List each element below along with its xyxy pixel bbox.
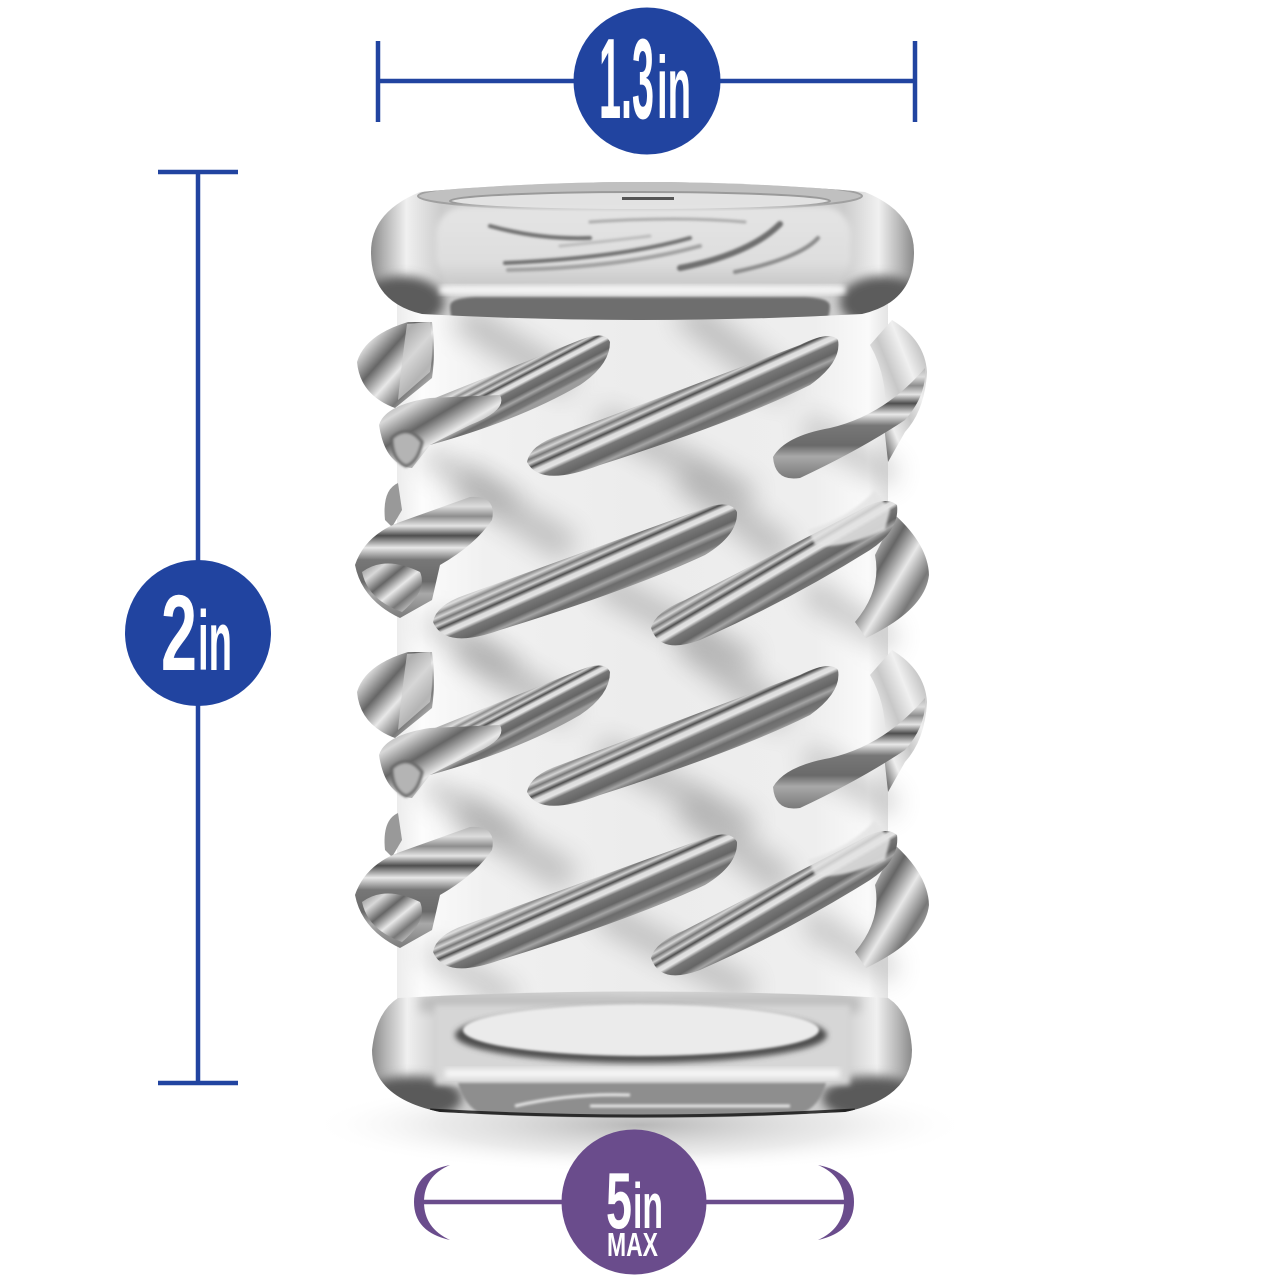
ridges row 3	[357, 650, 927, 809]
top ring	[371, 182, 914, 320]
center panel	[435, 1005, 850, 1085]
inner lens	[436, 207, 851, 285]
label: 5in: in	[633, 1170, 663, 1242]
label: 1.3in: 1.3	[599, 16, 654, 143]
dimension: height 2in	[125, 172, 271, 1083]
dimension: height 2in: in	[198, 594, 232, 688]
refracted ridge shadows	[422, 298, 898, 1009]
bottom ring	[372, 992, 912, 1118]
label: 1.3in	[599, 16, 691, 143]
top rim ellipse	[418, 181, 862, 211]
sleeve body	[397, 300, 888, 1010]
top band	[420, 996, 860, 1012]
base contact line	[430, 1110, 855, 1116]
dimension: width 1.3in	[378, 8, 915, 154]
base highlight lines	[515, 1095, 790, 1106]
lower highlight band	[445, 1069, 840, 1078]
label: 5in: 5	[606, 1156, 632, 1245]
lower highlight band	[440, 286, 845, 294]
dimension: circumference 5in max	[414, 1130, 854, 1274]
base reflection	[458, 1083, 826, 1118]
inner oval lens	[463, 1004, 819, 1056]
rim dark slit	[622, 197, 674, 200]
ridges row 1	[357, 320, 927, 479]
ground shadow	[310, 1077, 970, 1173]
lower dark bar	[448, 295, 832, 320]
swirl lines	[490, 219, 818, 272]
corner shading	[375, 268, 450, 315]
ridges row 4	[355, 813, 929, 975]
label: MAX: MAX	[607, 1226, 658, 1263]
dimension: width 1.3in: in	[657, 38, 691, 137]
inner dark ring	[455, 1007, 827, 1063]
ridges row 2	[355, 483, 929, 645]
corner shading	[378, 1068, 467, 1113]
product: ribbed clear sleeve	[355, 178, 929, 1125]
infographic canvas	[125, 8, 929, 1274]
label: 2in: 2	[161, 572, 197, 693]
